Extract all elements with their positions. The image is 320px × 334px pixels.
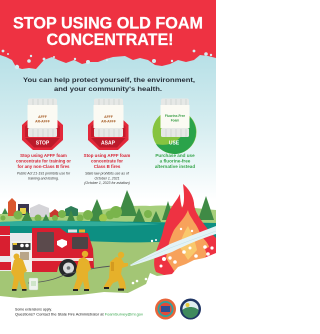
icon: green circle with fluorine-free jar: Foam	[171, 118, 179, 122]
asap instructions: Stop using AFFF foam	[84, 153, 130, 158]
icon: asap sign with AFFF jar: AFFF	[104, 115, 113, 119]
subheading	[23, 77, 195, 93]
asap instructions	[84, 153, 130, 169]
icon: asap sign with AFFF jar: ASAP	[101, 141, 116, 147]
panel: stop	[16, 98, 71, 180]
subheading: and your community's health.	[54, 86, 162, 93]
subheading: You can help protect yourself, the environment,	[23, 77, 195, 84]
stop legal note: training and testing.	[28, 176, 59, 180]
use instructions: Purchase and use	[155, 153, 195, 158]
stop instructions: Stop using AFFF foam	[20, 153, 67, 158]
foam concentrate jug	[29, 278, 38, 290]
stop instructions: concentrate for training or	[16, 158, 71, 164]
title: STOP USING OLD FOAM	[13, 14, 203, 32]
use instructions	[155, 153, 195, 169]
icon: stop sign with AFFF jar: AFFF	[38, 115, 47, 119]
title: CONCENTRATE!	[46, 31, 174, 49]
use instructions: alternative instead	[155, 164, 195, 169]
asap legal note	[84, 172, 130, 185]
hills	[0, 205, 216, 226]
firefighter 2	[73, 251, 91, 291]
asap instructions: Class B fires	[94, 164, 121, 169]
icon: stop sign with AFFF jar: STOP	[36, 141, 50, 147]
water spray	[130, 226, 216, 266]
asap legal note: State law prohibits use as of	[85, 172, 130, 176]
logo: state environmental seal	[180, 298, 201, 320]
stop legal note	[17, 172, 71, 180]
firefighter 1	[11, 254, 27, 291]
footer note: Questions? Contact the State Fire Administrator at FoamSurvey@mi.gov	[15, 312, 143, 316]
footer note	[15, 308, 143, 316]
use instructions: a fluorine-free	[160, 158, 191, 164]
asap legal note: October 1, 2021	[94, 176, 120, 180]
landscape scene	[0, 184, 216, 310]
icon: stop sign with AFFF jar: AR-AFFF	[35, 119, 50, 123]
asap legal note: (October 1, 2023 for aviation)	[84, 181, 130, 185]
grass	[0, 238, 216, 298]
panel: asap	[84, 98, 130, 185]
icon: green circle with fluorine-free jar	[152, 98, 196, 154]
panel: use	[152, 98, 196, 169]
fire engine	[0, 226, 94, 277]
houses	[8, 198, 78, 217]
flames	[154, 184, 216, 275]
logo: fire administrator seal	[155, 298, 176, 320]
asap instructions: concentrate for	[91, 158, 123, 164]
icon: green circle with fluorine-free jar: USE	[169, 141, 180, 147]
icon: stop sign with AFFF jar	[22, 98, 63, 150]
stop instructions	[16, 153, 71, 169]
icon: asap sign with AFFF jar	[88, 98, 128, 150]
footer note: Some extensions apply.	[15, 308, 52, 312]
river	[0, 221, 216, 244]
title	[13, 14, 203, 49]
stop legal note: Public Act 21-191 prohibits use for	[17, 172, 71, 176]
red foam banner	[0, 0, 216, 69]
fire hose	[28, 265, 126, 283]
foam pile	[120, 253, 216, 310]
icon: green circle with fluorine-free jar: Fluorine-Free	[165, 114, 185, 118]
trees	[0, 190, 214, 224]
icon: asap sign with AFFF jar: AR-AFFF	[101, 119, 116, 123]
firefighter 3	[103, 252, 128, 291]
stop instructions: for any non-Class B fires	[18, 164, 70, 169]
